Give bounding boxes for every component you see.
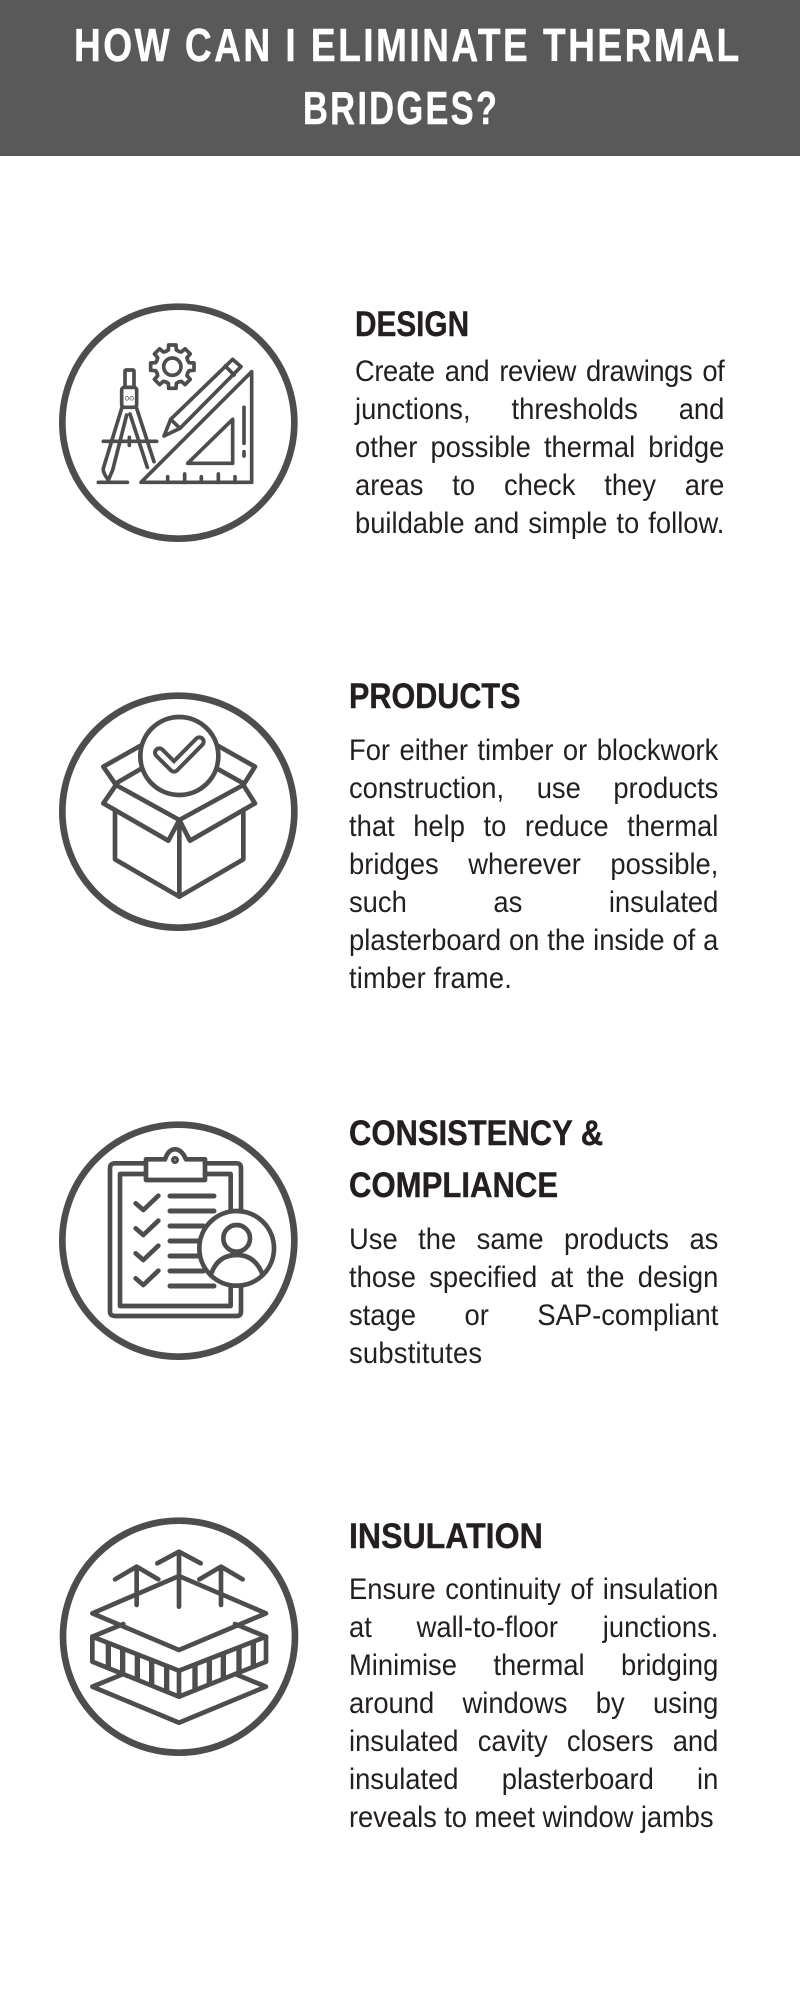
panel: insulation xyxy=(60,1517,718,1834)
check badge xyxy=(140,717,218,795)
heading: products: PRODUCTS xyxy=(348,677,520,716)
text: design xyxy=(354,355,725,540)
title banner xyxy=(0,0,800,156)
text: insulation: around windows by using xyxy=(348,1687,718,1720)
text: insulation: insulated plasterboard in xyxy=(348,1763,718,1796)
title line 1: HOW CAN I ELIMINATE THERMAL xyxy=(74,19,742,71)
pencil xyxy=(164,359,241,436)
bottom layer xyxy=(92,1674,266,1723)
text: consistency and compliance: Use the same products as xyxy=(348,1223,718,1256)
heading: insulation: INSULATION xyxy=(348,1517,542,1556)
box xyxy=(103,746,255,897)
insulation core xyxy=(92,1624,266,1697)
panel: products xyxy=(59,677,718,995)
text: design: buildable and simple to follow. xyxy=(354,507,724,540)
text: insulation: Minimise thermal bridging xyxy=(348,1649,718,1682)
text: design: other possible thermal bridge xyxy=(354,431,724,464)
checklist xyxy=(136,1196,214,1286)
text: insulation: insulated cavity closers and xyxy=(348,1725,718,1758)
clipboard xyxy=(110,1149,241,1316)
set square xyxy=(141,372,252,482)
compass xyxy=(98,370,157,482)
text: products: such as insulated xyxy=(348,886,718,919)
text: insulation xyxy=(348,1573,718,1834)
icon ring xyxy=(62,696,294,928)
icon: drawing tools xyxy=(59,303,298,542)
icon: clipboard checklist xyxy=(59,1121,298,1360)
panel: design xyxy=(59,303,725,542)
text: products: timber frame. xyxy=(348,962,511,995)
text: products: construction, use products xyxy=(348,772,718,805)
icon: approved box xyxy=(59,692,298,931)
top layer xyxy=(92,1576,266,1650)
heading line 1: CONSISTENCY & xyxy=(348,1114,603,1153)
text: design: junctions, thresholds and xyxy=(354,393,724,426)
text: insulation: Ensure continuity of insulation xyxy=(348,1573,718,1606)
text: insulation: reveals to meet window jambs xyxy=(348,1801,713,1834)
text: consistency and compliance xyxy=(348,1223,718,1370)
text: consistency and compliance: stage or SAP-compliant xyxy=(348,1299,718,1332)
gear xyxy=(151,345,194,388)
text: products: For either timber or blockwork xyxy=(348,734,718,767)
panel: consistency and compliance xyxy=(59,1114,718,1370)
icon ring xyxy=(63,1521,295,1753)
upward arrows xyxy=(115,1552,243,1607)
text: products xyxy=(348,734,718,995)
icon ring xyxy=(62,307,294,539)
text: products: that help to reduce thermal xyxy=(348,810,718,843)
text: consistency and compliance: those specified at the design xyxy=(348,1261,718,1294)
text: design: Create and review drawings of xyxy=(354,355,724,388)
text: design: areas to check they are xyxy=(354,469,724,502)
heading: consistency and compliance xyxy=(348,1114,603,1205)
heading: design: DESIGN xyxy=(354,305,469,344)
title line 2: BRIDGES? xyxy=(303,82,499,134)
person badge xyxy=(199,1211,274,1286)
text: products: plasterboard on the inside of a xyxy=(348,924,718,957)
icon ring xyxy=(62,1125,294,1357)
text: insulation: at wall-to-floor junctions. xyxy=(348,1611,718,1644)
text: products: bridges wherever possible, xyxy=(348,848,718,881)
icon: insulation layers xyxy=(60,1517,298,1756)
heading line 2: COMPLIANCE xyxy=(348,1166,558,1205)
text: consistency and compliance: substitutes xyxy=(348,1337,482,1370)
